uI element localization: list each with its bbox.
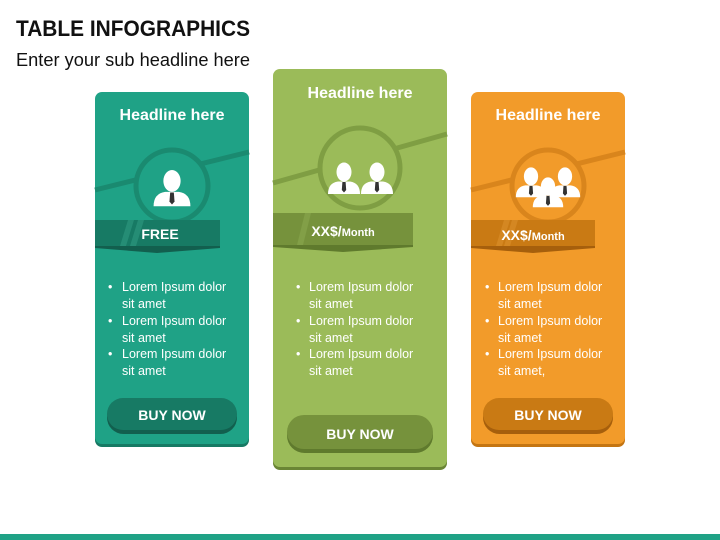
- subtitle: Enter your sub headline here: [16, 50, 250, 70]
- bullets: two-person: sit amet: [309, 297, 353, 311]
- bullets: free: [108, 280, 226, 378]
- bullets: two-person: sit amet: [309, 331, 353, 345]
- bullets: free: •: [108, 314, 112, 328]
- heading: free: Headline here: [120, 107, 225, 124]
- bullets: two-person: •: [296, 347, 300, 361]
- bullets: group: •: [485, 347, 489, 361]
- price band: two-person: [273, 213, 413, 252]
- bullets: group: Lorem Ipsum dolor: [498, 347, 602, 361]
- icon: single person: [136, 150, 208, 222]
- bullets: two-person: •: [296, 314, 300, 328]
- bullets: two-person: Lorem Ipsum dolor: [309, 347, 413, 361]
- button: group: BUY NOW: [514, 407, 582, 423]
- bullets: group: sit amet: [498, 331, 542, 345]
- bullets: free: sit amet: [122, 331, 166, 345]
- panel: free plan: [95, 92, 249, 447]
- bullets: group: •: [485, 280, 489, 294]
- price band: group: XX$/Month: [501, 227, 565, 243]
- button: two-person: [287, 415, 433, 453]
- icon: group of people: [512, 150, 584, 222]
- bullets: group: [485, 280, 602, 378]
- bullets: free: sit amet: [122, 297, 166, 311]
- bullets: free: •: [108, 347, 112, 361]
- icon: two people: [320, 128, 400, 208]
- bullets: two-person: Lorem Ipsum dolor: [309, 280, 413, 294]
- bullets: free: Lorem Ipsum dolor: [122, 280, 226, 294]
- footer bar: [0, 534, 720, 540]
- price band: free: [95, 220, 220, 253]
- bullets: two-person: Lorem Ipsum dolor: [309, 314, 413, 328]
- panel: two-person plan: [273, 69, 447, 470]
- button: two-person: BUY NOW: [326, 426, 394, 442]
- bullets: two-person: [296, 280, 413, 378]
- price band: group: [471, 220, 595, 253]
- bullets: two-person: •: [296, 280, 300, 294]
- bullets: two-person: sit amet: [309, 364, 353, 378]
- price band: free: FREE: [141, 226, 179, 242]
- bullets: free: sit amet: [122, 364, 166, 378]
- price band: two-person: XX$/Month: [311, 223, 375, 239]
- bullets: group: •: [485, 314, 489, 328]
- panel: group plan: [471, 92, 625, 447]
- heading: two-person: Headline here: [308, 85, 413, 102]
- title: TABLE INFOGRAPHICS: [16, 16, 250, 41]
- bullets: group: sit amet: [498, 297, 542, 311]
- bullets: free: Lorem Ipsum dolor: [122, 347, 226, 361]
- bullets: group: Lorem Ipsum dolor: [498, 314, 602, 328]
- bullets: group: sit amet,: [498, 364, 545, 378]
- bullets: free: •: [108, 280, 112, 294]
- button: free: BUY NOW: [138, 407, 206, 423]
- heading: group: Headline here: [496, 107, 601, 124]
- bullets: group: Lorem Ipsum dolor: [498, 280, 602, 294]
- button: group: [483, 398, 613, 434]
- bullets: free: Lorem Ipsum dolor: [122, 314, 226, 328]
- button: free: [107, 398, 237, 434]
